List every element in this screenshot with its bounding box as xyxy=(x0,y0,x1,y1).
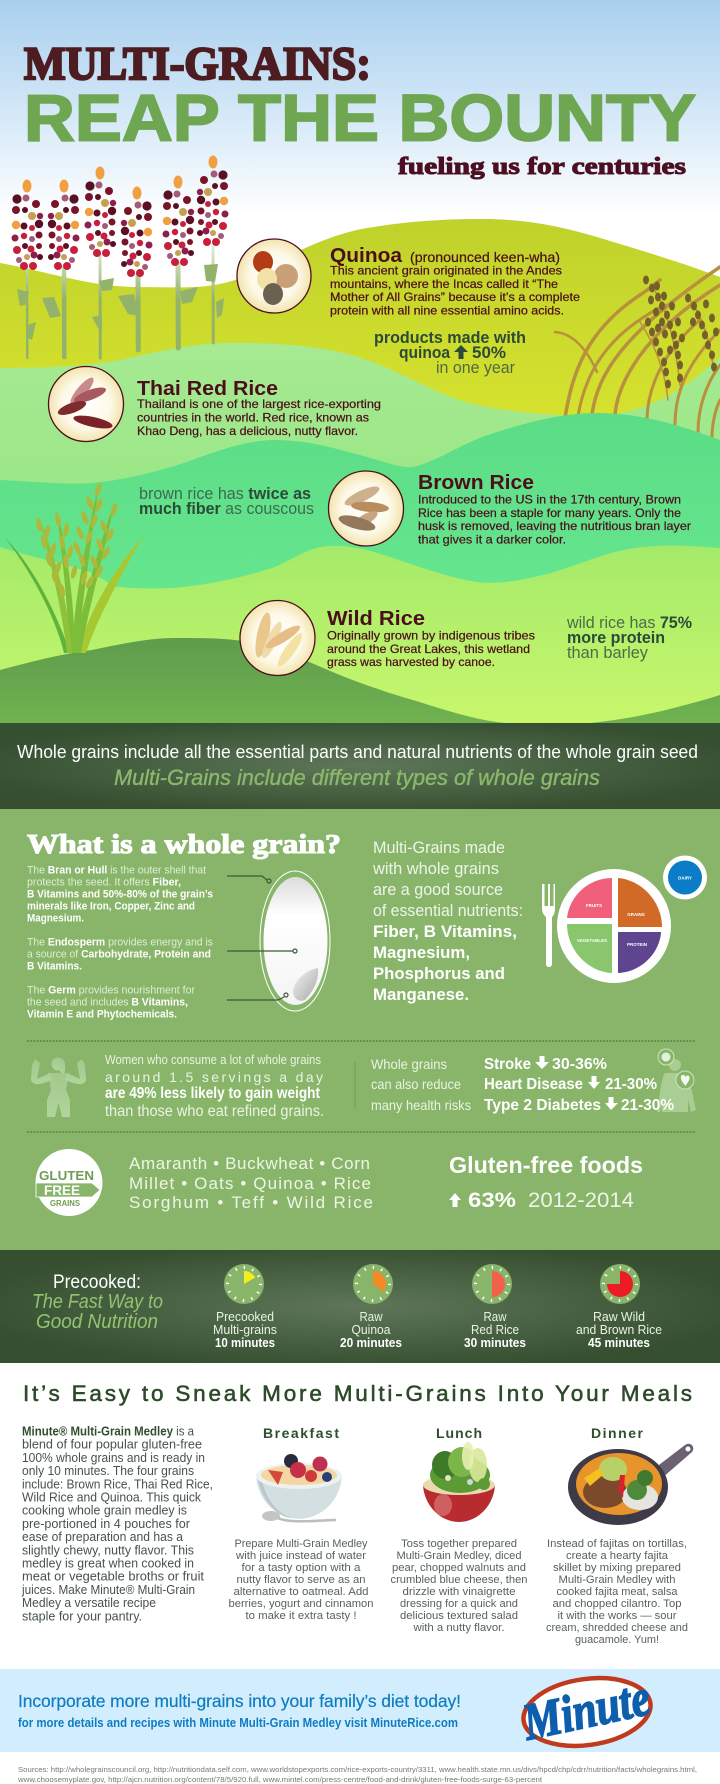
panel: quinoa: This ancient grain originated in the Andes xyxy=(330,264,562,278)
stat: gluten-free foods: 2012-2014 xyxy=(528,1189,634,1212)
icon: fajita skillet xyxy=(568,1444,693,1525)
panel: dinner: cooked fajita meat, salsa xyxy=(556,1586,678,1598)
title: Reap the Bounty: REAP THE BOUNTY xyxy=(24,80,696,154)
chart: my plate: DAIRY xyxy=(678,876,692,880)
clock: 20 minutes: 20 minutes xyxy=(340,1336,402,1350)
panel: thai red rice: countries in the world. Red rice, known as xyxy=(137,410,369,424)
chart: my plate: FRUITS xyxy=(586,903,602,908)
stat: brown rice fiber: brown rice has twice as xyxy=(139,484,311,503)
text block: germ: The Germ provides nourishment for xyxy=(27,984,195,996)
panel: breakfast: with juice instead of water xyxy=(235,1550,366,1562)
panel: lunch: dressing for a quick and xyxy=(400,1598,518,1610)
text block: gluten free grains: Amaranth • Buckwheat • Corn xyxy=(129,1154,370,1173)
heading: what is a whole grain: What is a whole grain? xyxy=(27,829,341,859)
panel: thai red rice: Thailand is one of the largest rice-exporting xyxy=(137,397,381,411)
panel: quinoa xyxy=(237,239,580,318)
stat: quinoa products: products made with xyxy=(374,328,526,347)
text block: endosperm: The Endosperm provides energy and is xyxy=(27,936,213,948)
text block: weight stat: than those who eat refined grains. xyxy=(105,1103,324,1120)
banner: whole grains intro xyxy=(0,723,720,809)
panel: dinner xyxy=(546,1425,693,1646)
stat: brown rice fiber: much fiber as couscous xyxy=(139,499,314,518)
panel: breakfast: Breakfast xyxy=(263,1425,339,1441)
panel: breakfast: berries, yogurt and cinnamon xyxy=(228,1598,374,1610)
stat: quinoa products: in one year xyxy=(436,358,515,377)
clock: 45 minutes xyxy=(576,1264,662,1350)
text block: health risks: can also reduce xyxy=(371,1076,461,1092)
sky background xyxy=(0,0,720,215)
text block: weight stat: around 1.5 servings a day xyxy=(105,1069,323,1085)
text block: germ: the seed and includes B Vitamins, xyxy=(27,996,188,1008)
stat list: stroke heart diabetes: Stroke xyxy=(484,1056,531,1073)
chart: my plate: PROTEIN xyxy=(627,942,647,947)
text block: weight stat: Women who consume a lot of whole grains xyxy=(105,1052,321,1067)
panel: dinner: Dinner xyxy=(591,1425,644,1441)
illustration: brown rice stalks xyxy=(555,267,720,437)
sources: www.choosemyplate.gov, http://ajcn.nutrition.org/content/78/5/920.full, www.mintel.com/press-centre/food-and-drink/gluten-free-foods-surge-63-percent xyxy=(17,1775,543,1784)
call to action band: for more details and recipes with Minute Multi-Grain Medley visit MinuteRice.com xyxy=(18,1715,458,1730)
heading: precooked xyxy=(32,1272,163,1333)
text block: nutrients: Magnesium, xyxy=(373,943,470,962)
panel: dinner: Instead of fajitas on tortillas, xyxy=(547,1538,687,1550)
text block: medley description: meat or vegetable broths or fruit xyxy=(22,1570,205,1584)
stat list: stroke heart diabetes: 21-30% xyxy=(605,1076,657,1093)
stat: brown rice fiber xyxy=(139,484,314,518)
stat: wild rice protein xyxy=(566,613,692,662)
panel: breakfast: nutty flavor to serve as an xyxy=(236,1574,366,1586)
call to action band xyxy=(0,1669,720,1754)
text block: bran: minerals like Iron, Copper, Zinc and xyxy=(27,900,195,912)
icon: woman flexing xyxy=(31,1058,86,1117)
text block: endosperm xyxy=(27,936,213,972)
text block: nutrients: Manganese. xyxy=(373,985,469,1004)
title: Multi-Grains: MULTI-GRAINS: xyxy=(24,38,371,90)
text block: gluten free grains: Millet • Oats • Quinoa • Rice xyxy=(129,1174,371,1193)
panel: dinner: it with the works — sour xyxy=(558,1610,677,1622)
subtitle: fueling us for centuries xyxy=(398,154,686,180)
text block: health risks: many health risks xyxy=(371,1097,471,1113)
stat list: stroke heart diabetes: Heart Disease xyxy=(484,1076,583,1093)
panel: brown rice: that gives it a darker color. xyxy=(418,532,566,546)
text block: medley description: ease of preparation and has a xyxy=(22,1530,183,1544)
panel: quinoa: protein with all nine essential amino acids. xyxy=(330,304,564,318)
icon: quinoa medallion xyxy=(237,239,311,313)
stat: gluten-free foods xyxy=(449,1152,643,1212)
panel: brown rice: Rice has been a staple for many years. Only the xyxy=(418,506,681,520)
icon: thai red rice medallion xyxy=(48,366,124,442)
heading: sneak more multi-grains: It’s Easy to Sneak More Multi-Grains Into Your Meals xyxy=(23,1381,692,1406)
stat: gluten-free foods: 63% xyxy=(468,1189,516,1212)
divider dots xyxy=(27,1040,696,1042)
clock: 30 minutes: Raw xyxy=(484,1310,507,1324)
panel: thai red rice: Thai Red Rice xyxy=(137,378,278,400)
panel: wild rice xyxy=(240,600,535,676)
panel: dinner: and chopped cilantro. Top xyxy=(552,1598,682,1610)
chart: my plate: GRAINS xyxy=(627,912,645,917)
clock: 20 minutes: Raw xyxy=(360,1310,383,1324)
panel: dinner: guacamole. Yum! xyxy=(575,1634,659,1646)
stat: wild rice protein: more protein xyxy=(567,628,665,647)
text block: medley description: only 10 minutes. The four grains xyxy=(22,1464,194,1478)
panel: lunch: delicious textured salad xyxy=(400,1610,518,1622)
panel: dinner: skillet by mixing prepared xyxy=(553,1562,681,1574)
panel: brown rice: husk is removed, leaving the nutritious bran layer xyxy=(418,519,691,533)
text block: bran xyxy=(27,864,213,924)
text block: bran: The Bran or Hull is the outer shell that xyxy=(27,864,206,876)
text block: medley description: Medley a versatile recipe xyxy=(22,1596,156,1610)
text block: medley description: pre-portioned in 4 pouches for xyxy=(22,1517,190,1531)
icon: brown rice medallion xyxy=(328,471,404,546)
illustration: green rice plant xyxy=(5,483,142,653)
text block: medley description xyxy=(21,1424,213,1623)
clock: 10 minutes: Multi-grains xyxy=(213,1323,277,1337)
stat: quinoa products: 50% xyxy=(472,343,506,362)
text block: weight stat xyxy=(105,1052,324,1120)
text block: bran: B Vitamins and 50%-80% of the grain’s xyxy=(27,888,213,900)
text block: health risks: Whole grains xyxy=(371,1056,447,1072)
text block: medley description: Wild Rice and Quinoa. This quick xyxy=(22,1490,202,1504)
logo: Minute: Minute xyxy=(517,1669,655,1752)
clock: 10 minutes: 10 minutes xyxy=(215,1336,275,1350)
text block: medley description: cooking whole grain medley is xyxy=(22,1504,187,1518)
banner: whole grains intro: Multi-Grains include different types of whole grains xyxy=(114,765,600,790)
clock: 20 minutes xyxy=(340,1264,402,1350)
panel: wild rice: Originally grown by indigenous tribes xyxy=(327,628,535,642)
panel: brown rice xyxy=(328,471,691,546)
clock: 45 minutes: Raw Wild xyxy=(593,1310,645,1324)
divider xyxy=(354,1062,356,1108)
panel: dinner: cream, shredded cheese and xyxy=(546,1622,688,1634)
stat list: stroke heart diabetes: 30-36% xyxy=(552,1056,607,1073)
icon: salad bowl xyxy=(423,1442,495,1522)
text block: nutrients: with whole grains xyxy=(372,859,499,878)
panel: quinoa: Quinoa xyxy=(330,245,403,267)
text block: medley description: slightly chewy, nutty flavor. This xyxy=(22,1543,194,1557)
chart: my plate: VEGETABLES xyxy=(577,938,607,943)
text block: nutrients: Fiber, B Vitamins, xyxy=(373,922,517,941)
text block: nutrients: Phosphorus and xyxy=(373,964,505,983)
panel: wild rice: Wild Rice xyxy=(327,608,425,630)
heading: precooked: The Fast Way to xyxy=(32,1291,163,1313)
chart: my plate xyxy=(557,856,707,983)
sources: Sources: http://wholegrainscouncil.org, http://nutritiondata.self.com, www.worldstopexports.com/rice-exports-country/3311, www.health.state.mn.us/divs/hpcd/chp/cdrr/nutrition/facts/wholegrains.html, xyxy=(18,1765,697,1774)
text block: medley description: staple for your pantry. xyxy=(22,1609,142,1623)
badge: gluten free: GLUTEN xyxy=(39,1168,94,1183)
clock: 10 minutes: Precooked xyxy=(216,1310,274,1324)
text block: nutrients: Multi-Grains made xyxy=(373,838,505,857)
text block: germ xyxy=(27,984,195,1020)
banner: whole grains intro: Whole grains include all the essential parts and natural nutrients of the whole grain seed xyxy=(17,742,698,762)
panel: lunch: Lunch xyxy=(436,1425,482,1441)
panel: breakfast: to make it extra tasty ! xyxy=(246,1610,356,1622)
stat list: stroke heart diabetes: Type 2 Diabetes xyxy=(484,1097,601,1114)
panel: dinner: Multi-Grain Medley with xyxy=(558,1574,676,1586)
badge: gluten free: GRAINS xyxy=(50,1199,81,1208)
heading: precooked: Precooked: xyxy=(53,1272,141,1293)
text block: endosperm: a source of Carbohydrate, Protein and xyxy=(27,948,211,960)
panel: wild rice: grass was harvested by canoe. xyxy=(327,655,495,669)
panel: lunch: crumbled blue cheese, then xyxy=(390,1574,528,1586)
panel: lunch xyxy=(390,1425,528,1634)
panel: quinoa: mountains, where the Incas called it “The xyxy=(330,277,558,291)
panel: brown rice: Introduced to the US in the 17th century, Brown xyxy=(418,492,681,506)
text block: medley description: juices. Make Minute® Multi-Grain xyxy=(21,1583,195,1597)
stat: wild rice protein: wild rice has 75% xyxy=(566,613,692,632)
panel: wild rice: around the Great Lakes, this wetland xyxy=(327,642,530,656)
banner: precooked xyxy=(0,1250,720,1363)
panel: whole grain facts xyxy=(0,809,720,1250)
stat: gluten-free foods: Gluten-free foods xyxy=(449,1152,643,1178)
clock: 45 minutes: and Brown Rice xyxy=(576,1323,662,1337)
icon: body with organs xyxy=(657,1049,696,1112)
icon: wild rice medallion xyxy=(240,600,315,676)
panel: breakfast: Prepare Multi-Grain Medley xyxy=(234,1538,368,1550)
landscape hills: yellow and light green xyxy=(0,219,720,560)
landscape hills: mid green, lime and dark green xyxy=(0,413,720,723)
panel: breakfast xyxy=(228,1425,374,1622)
clock: 45 minutes: 45 minutes xyxy=(588,1336,650,1350)
panel: breakfast: for a tasty option with a xyxy=(242,1562,361,1574)
diagram: grain seed xyxy=(227,871,330,1011)
panel: lunch: Toss together prepared xyxy=(401,1538,517,1550)
text block: nutrients: of essential nutrients: xyxy=(373,901,523,920)
panel: dinner: create a hearty fajita xyxy=(566,1550,669,1562)
text block: medley description: Minute® Multi-Grain Medley is a xyxy=(22,1424,194,1438)
sources xyxy=(17,1765,697,1784)
call to action band: Incorporate more multi-grains into your family’s diet today! xyxy=(18,1691,461,1711)
text block: medley description: include: Brown Rice, Thai Red Rice, xyxy=(22,1477,213,1491)
text block: health risks xyxy=(371,1056,471,1113)
panel: quinoa: Mother of All Grains” because it’s a complete xyxy=(330,290,580,304)
text block: weight stat: are 49% less likely to gain weight xyxy=(105,1085,320,1102)
clock: 30 minutes: Red Rice xyxy=(471,1323,519,1337)
panel: breakfast: alternative to oatmeal. Add xyxy=(234,1586,368,1598)
clock: 30 minutes: 30 minutes xyxy=(464,1336,526,1350)
text block: medley description: medley is great when cooked in xyxy=(22,1556,194,1570)
clock: 20 minutes: Quinoa xyxy=(352,1323,391,1337)
text block: germ: Vitamin E and Phytochemicals. xyxy=(27,1008,177,1020)
panel: brown rice: Brown Rice xyxy=(418,472,534,494)
icon: cereal bowl xyxy=(256,1454,342,1521)
panel: lunch: Multi-Grain Medley, diced xyxy=(396,1550,522,1562)
panel: quinoa: (pronounced keen-wha) xyxy=(410,249,560,265)
panel: thai red rice xyxy=(48,366,381,442)
panel: thai red rice: Khao Deng, has a delicious, nutty flavor. xyxy=(137,424,358,438)
illustration: sorghum plants xyxy=(12,156,228,358)
text block: medley description: blend of four popular gluten-free xyxy=(22,1438,202,1452)
text block: bran: Magnesium. xyxy=(27,912,84,924)
text block: nutrients: are a good source xyxy=(373,880,503,899)
text block: gluten free grains xyxy=(129,1154,373,1212)
icon: fork xyxy=(542,884,555,967)
badge: gluten free: FREE xyxy=(44,1182,80,1198)
stat list: stroke heart diabetes: 21-30% xyxy=(621,1097,674,1114)
text block: nutrients xyxy=(372,838,523,1004)
badge: gluten free xyxy=(36,1149,102,1216)
clock: 30 minutes xyxy=(464,1264,526,1350)
stat: wild rice protein: than barley xyxy=(567,643,648,662)
clock: 10 minutes xyxy=(213,1264,277,1350)
stat list: stroke heart diabetes xyxy=(484,1056,674,1114)
panel: lunch: with a nutty flavor. xyxy=(412,1622,504,1634)
text block: medley description: 100% whole grains and is ready in xyxy=(22,1451,205,1465)
panel: lunch: pear, chopped walnuts and xyxy=(392,1562,526,1574)
text block: gluten free grains: Sorghum • Teff • Wild Rice xyxy=(129,1193,373,1212)
panel: lunch: drizzle with vinaigrette xyxy=(402,1586,516,1598)
text block: bran: protects the seed. It offers Fiber, xyxy=(27,876,181,888)
heading: precooked: Good Nutrition xyxy=(36,1311,158,1333)
text block: endosperm: B Vitamins. xyxy=(27,960,82,972)
stat: quinoa products xyxy=(374,328,526,377)
stat: quinoa products: quinoa xyxy=(399,343,450,362)
